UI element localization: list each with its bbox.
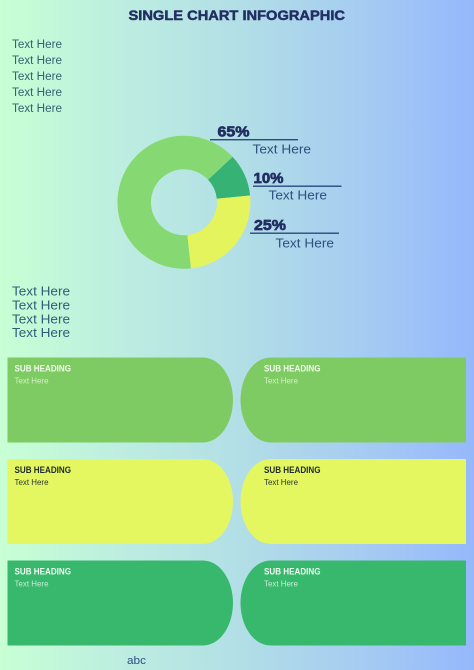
panel: green left (8, 358, 233, 442)
panel: dark green left: Text Here (14, 578, 49, 588)
panel: dark green right: SUB HEADING (264, 566, 320, 576)
text block: top list: Text Here (12, 87, 62, 99)
panel: green left: Text Here (14, 376, 49, 386)
segment: 10% dark green (208, 157, 250, 199)
text block: lower list: Text Here (12, 298, 70, 312)
callout: 25% (250, 217, 339, 250)
panel: dark green left: SUB HEADING (14, 566, 71, 576)
text block: top list (12, 39, 62, 115)
callout: 65%: 65% (218, 124, 250, 140)
text block: lower list: Text Here (12, 284, 70, 298)
text block: lower list: Text Here (12, 325, 70, 340)
text block: lower list (12, 284, 70, 340)
callout: 10%: 10% (254, 170, 284, 187)
panel: yellow left: Text Here (14, 477, 49, 487)
callout: 65% (210, 124, 311, 156)
panel: yellow right: SUB HEADING (264, 465, 320, 475)
title: SINGLE CHART INFOGRAPHIC (128, 7, 345, 23)
panel: green left: SUB HEADING (14, 364, 71, 374)
callout: 65%: Text Here (252, 142, 311, 156)
segment: 65% light green (117, 136, 233, 269)
callout: 10% (253, 170, 342, 202)
panel: dark green right (241, 560, 466, 646)
panel: yellow right: Text Here (264, 477, 298, 487)
panel: dark green right: Text Here (264, 578, 298, 588)
panel: dark green left (8, 560, 233, 646)
segment: 25% yellow (187, 196, 250, 268)
panel: yellow right (241, 459, 466, 544)
text block: top list: Text Here (12, 55, 62, 67)
donut chart (117, 136, 250, 269)
panel: yellow left: SUB HEADING (14, 465, 71, 475)
text block: top list: Text Here (12, 39, 62, 51)
panel: green right: Text Here (264, 376, 298, 386)
footer label: abc (127, 655, 147, 667)
callout: 25%: 25% (254, 217, 286, 234)
panel: green right: SUB HEADING (264, 364, 320, 374)
callout: 25%: Text Here (276, 236, 334, 250)
text block: lower list: Text Here (12, 312, 70, 326)
callout: 10%: Text Here (268, 188, 327, 202)
panel: green right (241, 358, 466, 442)
text block: top list: Text Here (12, 103, 62, 115)
panel: yellow left (8, 459, 233, 544)
text block: top list: Text Here (12, 71, 62, 83)
